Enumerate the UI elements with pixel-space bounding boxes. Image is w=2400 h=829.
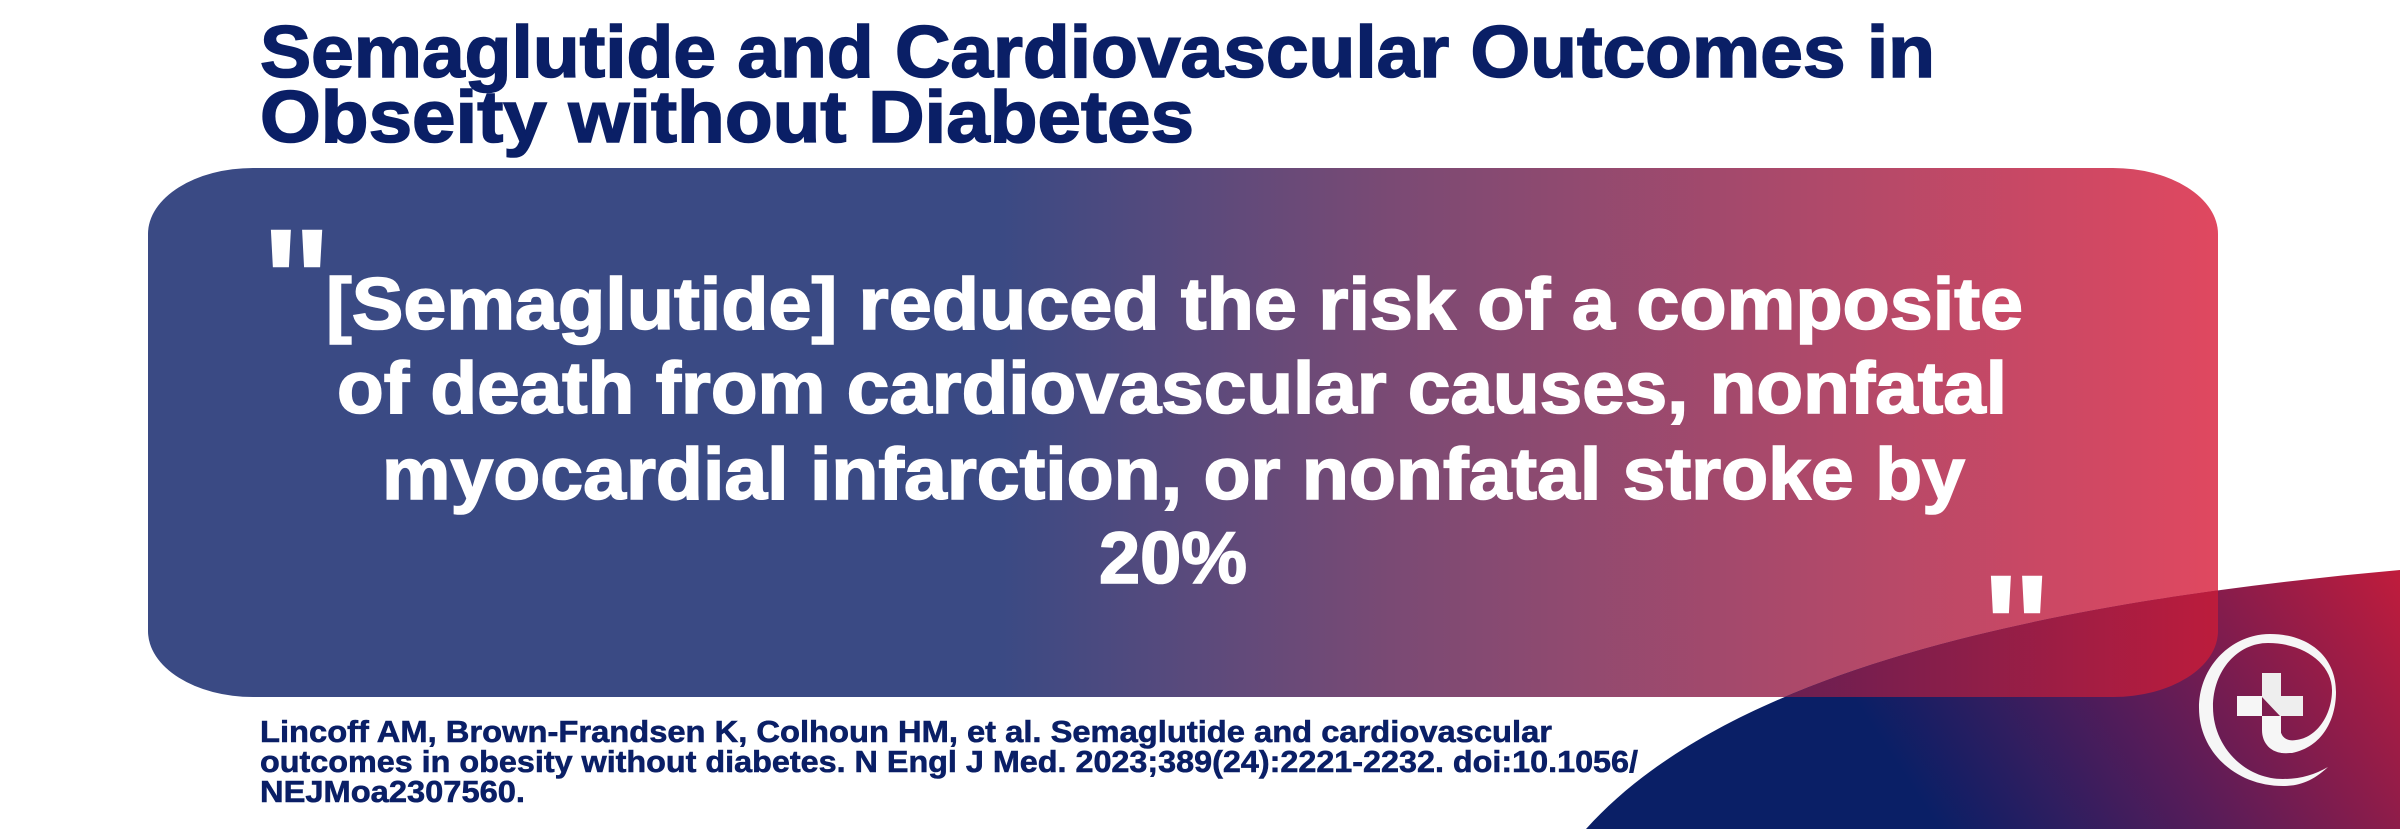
title: Semaglutide and Cardiovascular Outcomes in (260, 12, 1935, 93)
logo crescent (2199, 634, 2336, 786)
quote text: 20% (1099, 518, 1247, 599)
decorative wave: bottom right corner (1586, 570, 2400, 829)
wave overlap with panel (1785, 590, 2218, 697)
logo cross left (2237, 696, 2262, 716)
title: Obseity without Diabetes (260, 77, 1194, 158)
citation: outcomes in obesity without diabetes. N Engl J Med. 2023;389(24):2221-2232. doi:10.1056/ (260, 744, 1638, 779)
citation: Lincoff AM, Brown-Frandsen K, Colhoun HM, et al. Semaglutide and cardiovascular (260, 714, 1552, 749)
quote text: myocardial infarction, or nonfatal stroke by (382, 434, 1965, 515)
title (260, 12, 1935, 158)
quote text: [Semaglutide] reduced the risk of a composite (326, 264, 2023, 345)
icon: logo (2199, 634, 2336, 786)
quote text (326, 264, 2023, 599)
citation (260, 714, 1638, 809)
citation: NEJMoa2307560. (260, 774, 525, 809)
logo t stem (2262, 716, 2290, 753)
opening quote mark: " (261, 197, 332, 365)
closing quote mark: " (1981, 543, 2052, 711)
logo cross right (2262, 673, 2303, 716)
quote text: of death from cardiovascular causes, nonfatal (337, 348, 2007, 429)
panel: quote background (148, 168, 2218, 697)
